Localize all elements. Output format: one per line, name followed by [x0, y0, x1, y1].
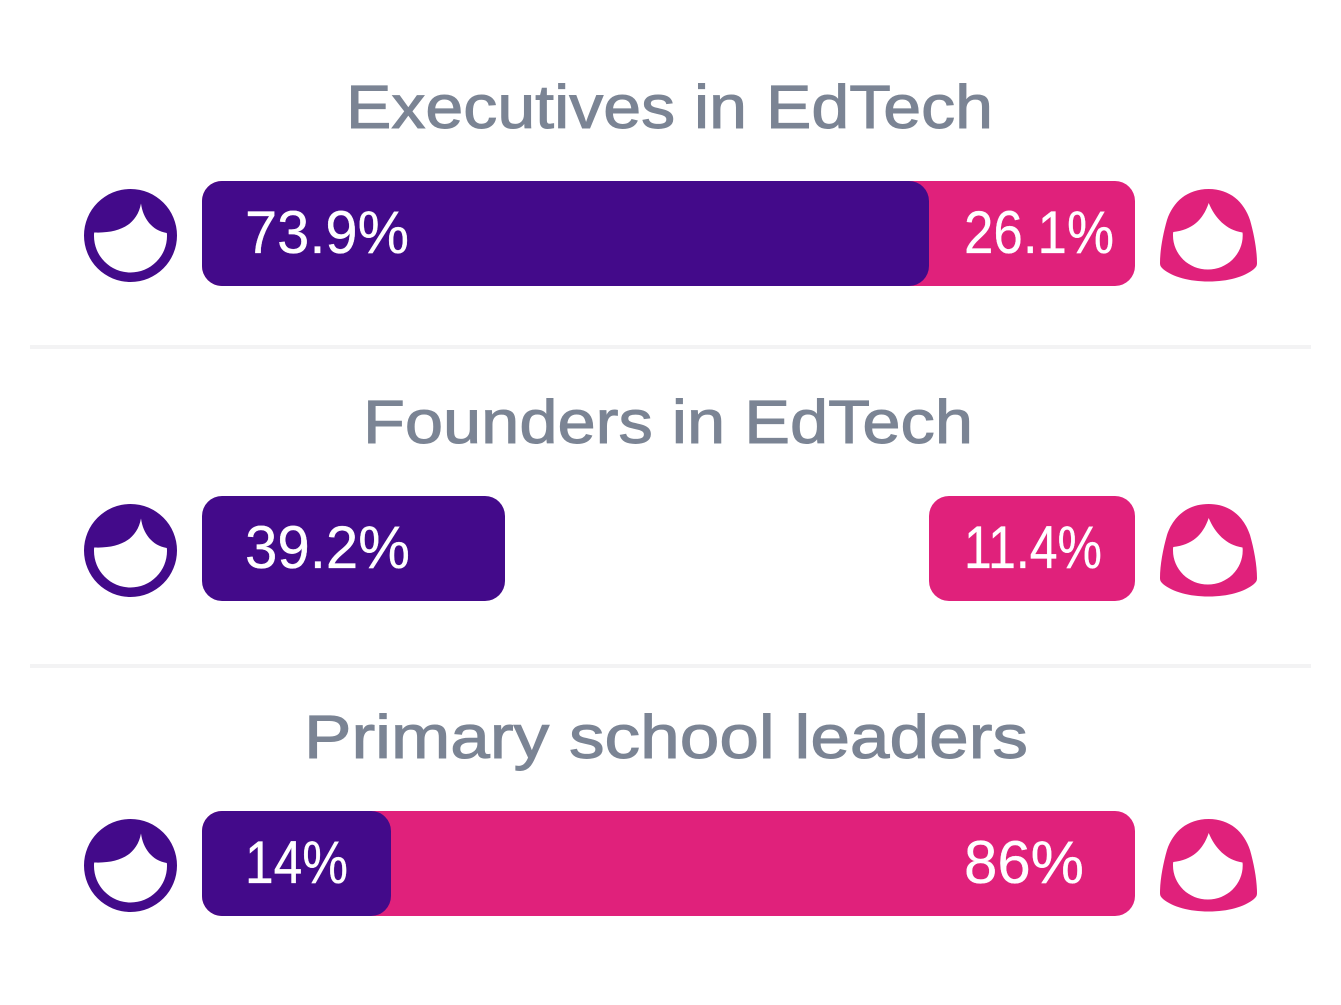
icon: male face: [84, 819, 177, 912]
heading: founders: Founders in EdTech: [363, 388, 973, 456]
bar: men share: [202, 181, 929, 286]
bar: women share: [202, 181, 1135, 286]
panel: founders in EdTech: [84, 388, 1257, 601]
bar: women share: [202, 811, 1135, 916]
bar: men share: [202, 496, 505, 601]
icon: female face: [1160, 504, 1257, 596]
value: women: 11.4%: [964, 514, 1102, 581]
value: men: 39.2%: [245, 514, 410, 581]
value: men: 14%: [245, 829, 348, 896]
value: women: 86%: [964, 829, 1084, 896]
value: men: 73.9%: [245, 199, 409, 266]
icon: female face: [1160, 189, 1257, 282]
heading: executives: Executives in EdTech: [346, 73, 993, 141]
heading: primary school leaders: Primary school leaders: [304, 703, 1028, 771]
panel: primary school leaders: [84, 703, 1257, 916]
icon: male face: [84, 189, 177, 282]
icon: female face: [1160, 819, 1257, 912]
bar: men share: [202, 811, 391, 916]
panel: executives in EdTech: [84, 73, 1257, 286]
bar: women share: [929, 496, 1135, 601]
value: women: 26.1%: [964, 199, 1114, 266]
icon: male face: [84, 504, 177, 597]
